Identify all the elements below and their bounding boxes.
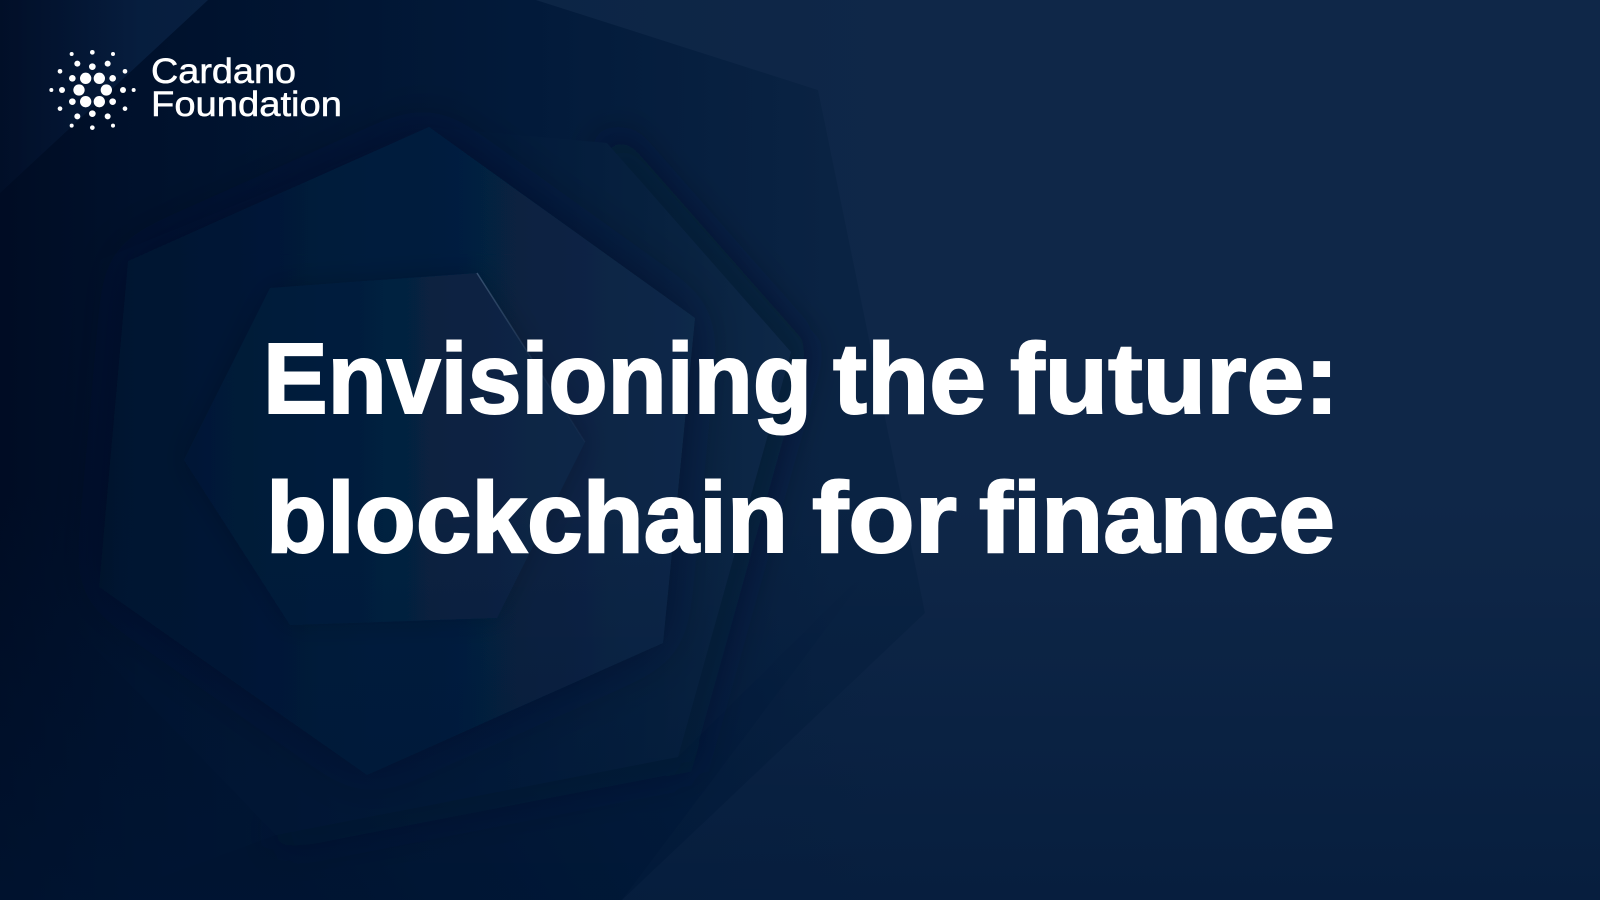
background hexagon layer 1 <box>184 273 585 625</box>
title: for <box>812 462 957 574</box>
logo wordmark: Cardano <box>151 52 296 91</box>
title: finance <box>979 462 1335 574</box>
lower dark wedge <box>100 557 880 900</box>
layer 3 edge shadow <box>276 143 791 835</box>
title <box>263 323 1339 574</box>
title: the <box>833 323 986 435</box>
title: future: <box>1010 323 1339 435</box>
title: blockchain <box>266 462 788 574</box>
logo <box>49 50 342 130</box>
title: Envisioning <box>263 323 812 435</box>
logo wordmark <box>151 52 342 124</box>
logo wordmark: Foundation <box>151 85 342 124</box>
background hexagon layer 4 <box>0 0 925 900</box>
hexagon highlight edge <box>477 273 585 442</box>
left edge darkening <box>0 0 140 900</box>
background hexagon layer 3 <box>60 127 791 835</box>
icon: Cardano dots <box>49 50 136 130</box>
background hexagon layer 2 <box>99 127 695 775</box>
